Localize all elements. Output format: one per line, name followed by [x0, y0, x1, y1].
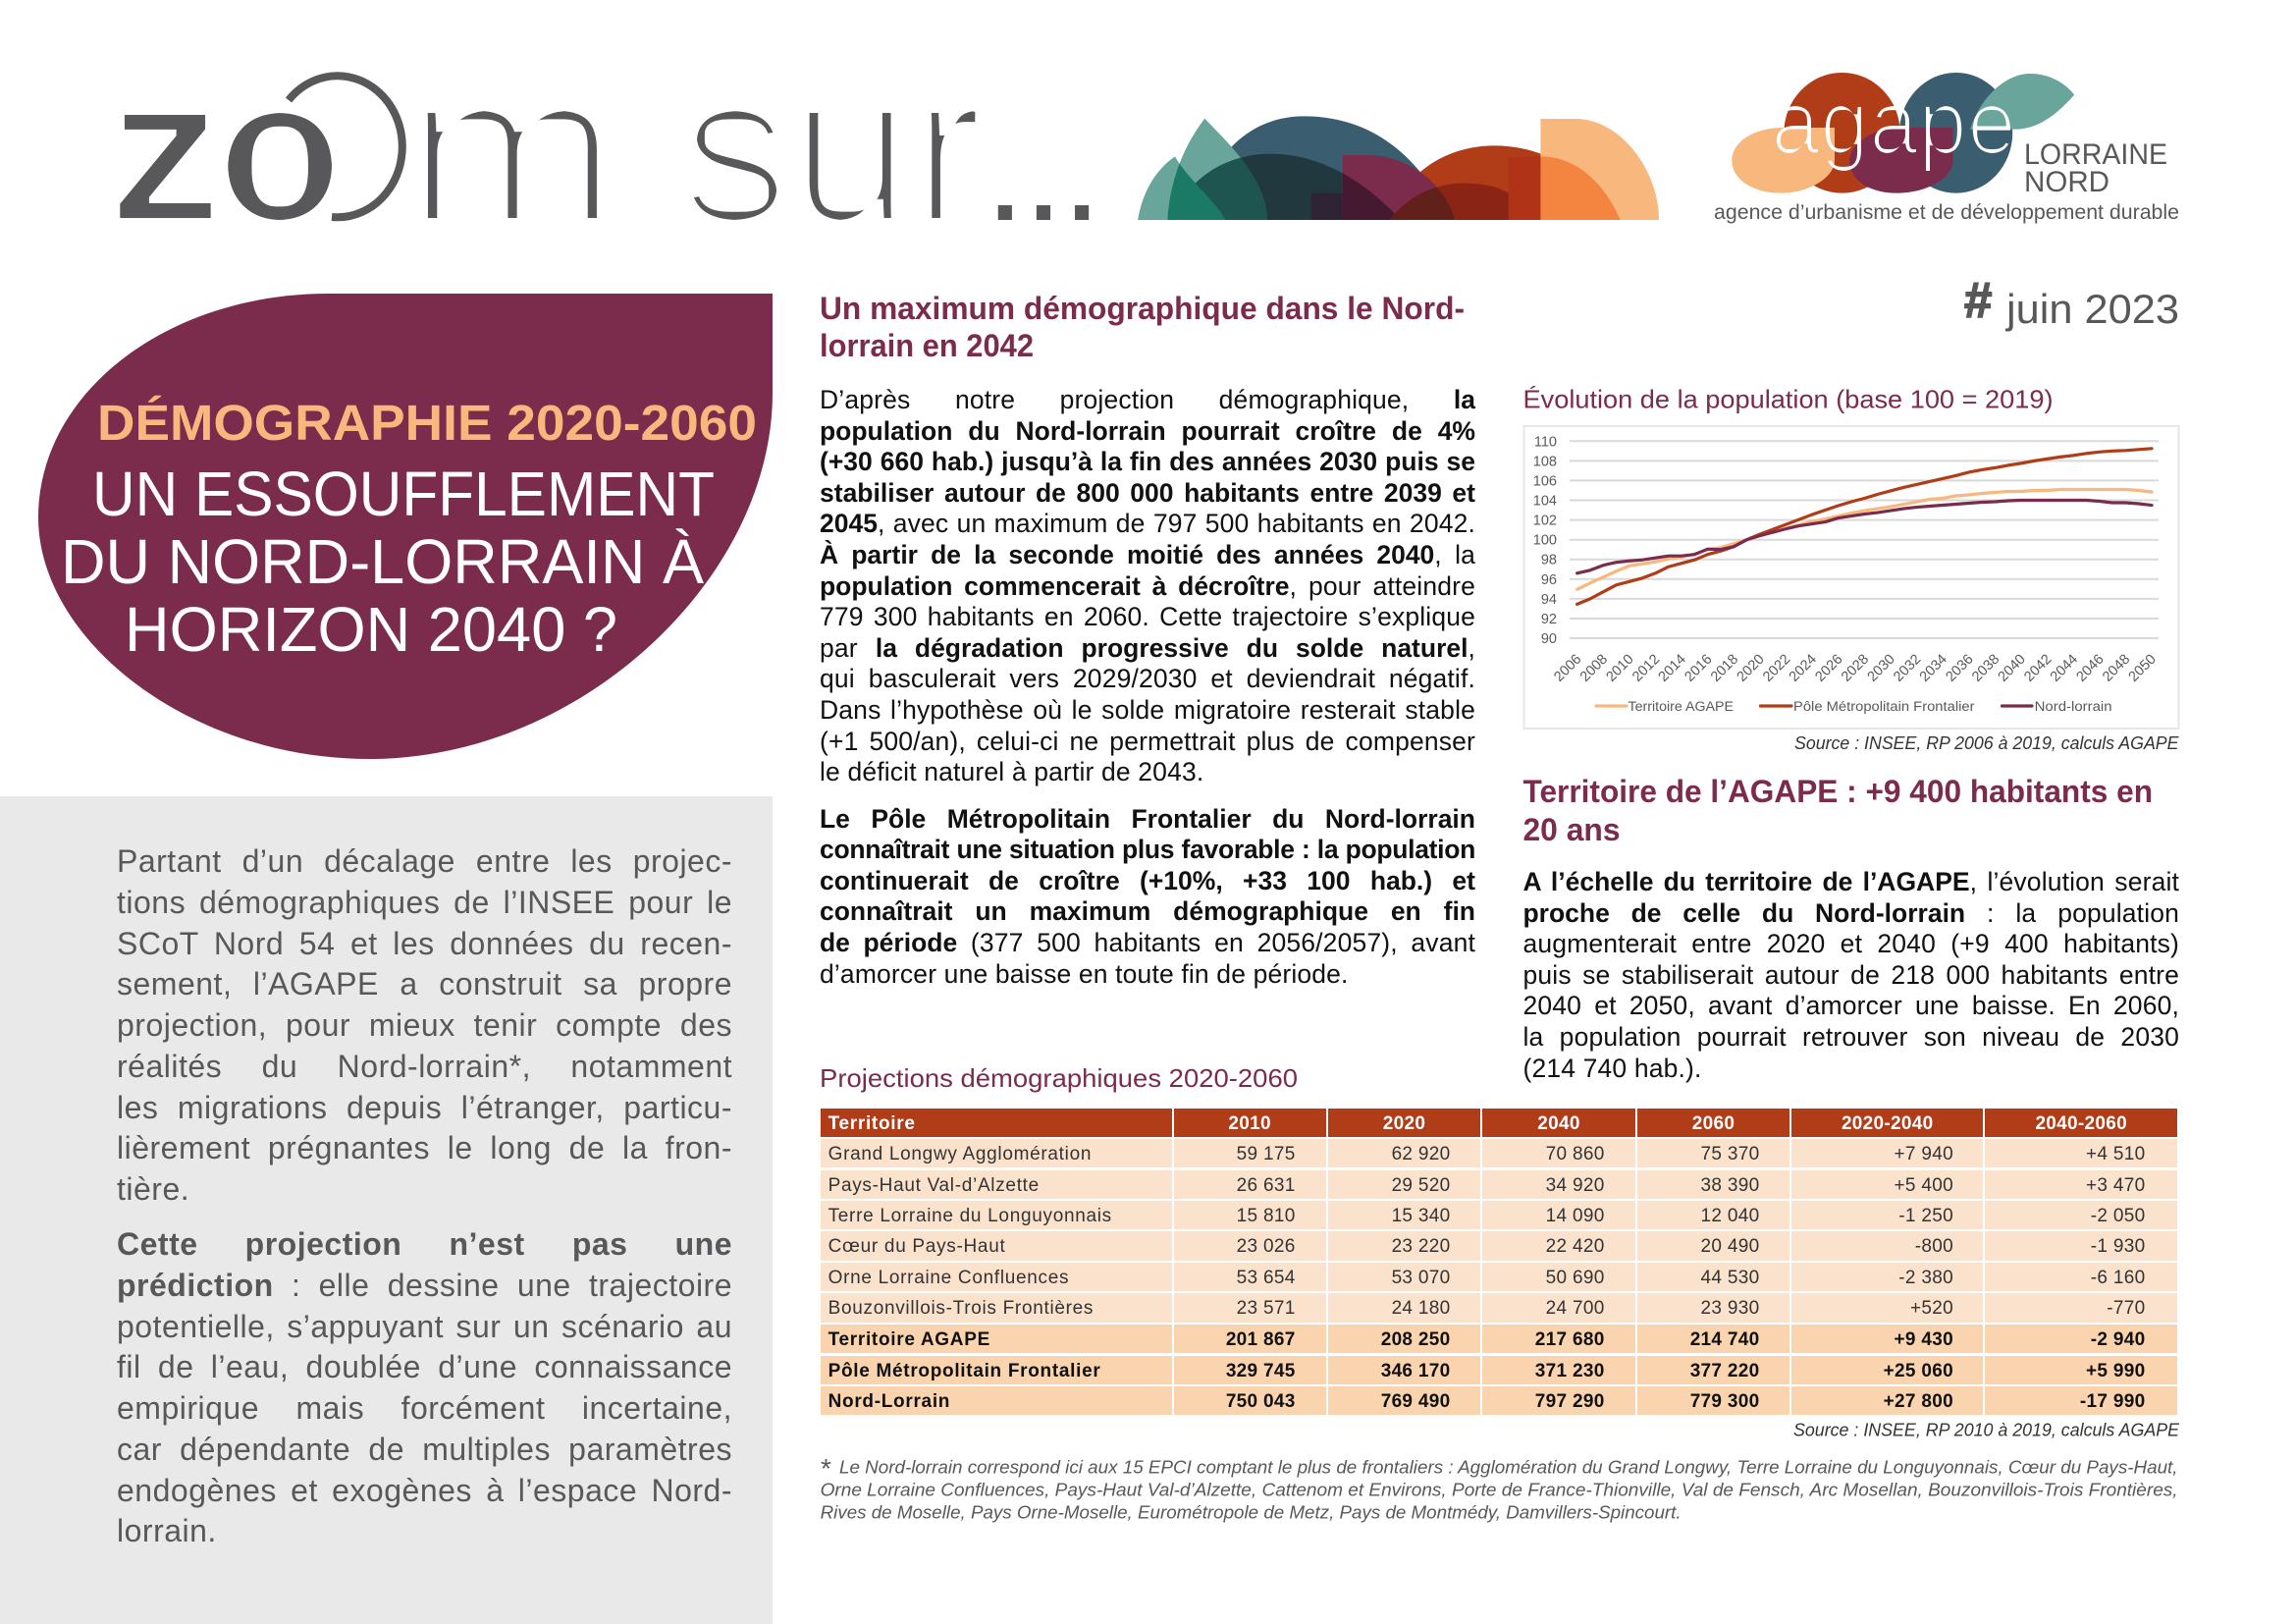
row: Terre Lorraine	[821, 1201, 2177, 1229]
text block: main paragraph two: Le Pôle Métropolitain Frontalier du Nord-lorrain	[820, 804, 1475, 834]
panel: title blob	[38, 294, 773, 759]
row: Bouzonvillois: 24 700	[1546, 1298, 1605, 1319]
row: Coeur du Pays-Haut: 23 220	[1392, 1236, 1450, 1257]
logo: agape Lorraine Nord: agence d’urbanisme et de développement durable	[1714, 201, 2179, 224]
heading: un maximum démographique: Un maximum démographique dans le Nord-	[820, 291, 1465, 326]
row: Territoire AGAPE: -2 940	[2091, 1329, 2145, 1350]
footnote: *	[821, 1453, 831, 1484]
chart x axis labels: 2036	[1943, 652, 1977, 685]
chart x axis labels: 2014	[1656, 652, 1689, 685]
chart x axis labels: 2048	[2100, 652, 2133, 685]
chart x axis labels: 2050	[2126, 652, 2160, 685]
heading: territoire de l'AGAPE: 20 ans	[1523, 812, 1620, 847]
table header: 2040	[1537, 1113, 1580, 1134]
text block: right column paragraph: 2040 et 2050, avant d’amorcer une baisse. En 2060,	[1523, 991, 2179, 1020]
row: Terre Lorraine: 12 040	[1701, 1206, 1759, 1226]
row: Bouzonvillois: 23 930	[1701, 1298, 1759, 1319]
title: zoom sur...	[108, 31, 1095, 266]
row: Terre Lorraine: -1 250	[1898, 1206, 1953, 1226]
chart source: Source : INSEE, RP 2006 à 2019, calculs AGAPE	[1794, 732, 2179, 753]
row: Territoire AGAPE: 214 740	[1690, 1329, 1759, 1350]
row: Bouzonvillois: 23 571	[1237, 1298, 1296, 1319]
row: Nord-Lorrain: 797 290	[1535, 1391, 1605, 1412]
row: Nord-Lorrain: 769 490	[1381, 1391, 1450, 1412]
row: Pays-Haut Val-d'Alzette	[821, 1170, 2177, 1199]
text block: side intro paragraph: Partant d’un décalage entre les projec-	[117, 843, 732, 879]
text block: main paragraph one: 2045, avec un maximum de 797 500 habitants en 2042.	[820, 509, 1475, 538]
row: Orne Lorraine: 53 070	[1392, 1268, 1450, 1288]
illustration: overlapping hills	[1138, 116, 1659, 220]
text block: side intro paragraph: lièrement prégnantes le long de la fron-	[117, 1130, 732, 1165]
row: Coeur du Pays-Haut	[821, 1231, 2177, 1261]
row: Pays-Haut Val-d'Alzette: +3 470	[2086, 1175, 2145, 1196]
row: Territoire AGAPE: Territoire AGAPE	[828, 1329, 990, 1350]
row: Pôle Métropolitain: 377 220	[1690, 1361, 1759, 1381]
chart x axis labels: 2012	[1629, 652, 1663, 685]
chart x axis labels: 2040	[1996, 652, 2029, 685]
row: Bouzonvillois: Bouzonvillois-Trois Frontières	[828, 1298, 1094, 1319]
chart x axis labels: 2006	[1551, 652, 1584, 685]
row: Pôle Métropolitain: 371 230	[1535, 1361, 1605, 1381]
text block: right column paragraph: la population pourrait retrouver son niveau de 2030	[1523, 1022, 2179, 1052]
row: Territoire AGAPE: 201 867	[1226, 1329, 1296, 1350]
row: Grand Longwy	[821, 1139, 2177, 1167]
row: Territoire AGAPE: 217 680	[1535, 1329, 1605, 1350]
chart x axis labels: 2016	[1682, 652, 1716, 685]
chart y axis labels: 92	[1541, 612, 1557, 627]
text block: main paragraph two: connaîtrait une situation plus favorable : la population	[820, 835, 1475, 864]
text block: right column paragraph: A l’échelle du territoire de l’AGAPE, l’évolution serait	[1523, 867, 2179, 896]
chart x axis labels: 2010	[1603, 652, 1637, 685]
text block: side intro paragraph: les migrations depuis l’étranger, particu-	[117, 1090, 732, 1125]
row: Nord-Lorrain: -17 990	[2080, 1391, 2145, 1412]
chart y axis labels: 102	[1533, 513, 1557, 528]
row: Grand Longwy: 62 920	[1392, 1144, 1450, 1164]
text block: side prediction paragraph: car dépendante de multiples paramètres	[117, 1432, 732, 1467]
chart x axis labels: 2046	[2073, 652, 2108, 685]
chart legend: Nord-lorrain	[2035, 699, 2112, 714]
row: Pays-Haut Val-d'Alzette: 38 390	[1701, 1175, 1759, 1196]
row: Grand Longwy: 70 860	[1546, 1144, 1605, 1164]
row: Coeur du Pays-Haut: -1 930	[2091, 1236, 2145, 1257]
chart data lines	[1577, 449, 2152, 604]
row: Coeur du Pays-Haut: -800	[1915, 1236, 1953, 1257]
text block: main paragraph two: connaîtrait un maximum démographique en fin	[820, 896, 1475, 926]
chart y axis labels: 106	[1533, 473, 1557, 489]
text block: side prediction paragraph: Cette projection n’est pas une	[117, 1226, 732, 1262]
text block: main paragraph two: d’amorcer une baisse en toute fin de période.	[820, 959, 1349, 989]
logo: agape Lorraine Nord	[1714, 73, 2179, 224]
chart x axis labels: 2030	[1865, 652, 1898, 685]
text block: side intro paragraph: tions démographiques de l’INSEE pour le	[117, 885, 732, 920]
row: Orne Lorraine: 50 690	[1546, 1268, 1605, 1288]
text block: side intro paragraph: SCoT Nord 54 et les données du recen-	[117, 925, 732, 960]
text block: right column paragraph: augmenterait entre 2020 et 2040 (+9 400 habitants)	[1523, 929, 2179, 958]
text block: main paragraph one: par la dégradation progressive du solde naturel,	[820, 633, 1475, 663]
chart y axis labels: 96	[1541, 572, 1557, 588]
chart y axis labels: 104	[1533, 493, 1557, 509]
panel: title blob: UN ESSOUFFLEMENT	[92, 459, 715, 529]
heading: un maximum démographique: lorrain en 2042	[820, 328, 1034, 363]
heading: territoire de l'AGAPE: Territoire de l’AGAPE : +9 400 habitants en	[1523, 774, 2153, 809]
chart x axis labels: 2044	[2048, 652, 2081, 685]
chart x axis labels: 2022	[1760, 652, 1793, 685]
text block: main paragraph one: À partir de la seconde moitié des années 2040, la	[820, 540, 1475, 569]
row: Pôle Métropolitain: +25 060	[1884, 1361, 1953, 1381]
row: Territoire AGAPE: 208 250	[1381, 1329, 1450, 1350]
chart x axis labels: 2026	[1812, 652, 1846, 685]
text block: main paragraph two: continuerait de croître (+10%, +33 100 hab.) et	[820, 866, 1475, 895]
chart y axis labels: 94	[1541, 592, 1557, 608]
title: zoom sur...: o	[217, 34, 343, 265]
heading: territoire de l'AGAPE	[1523, 774, 2153, 847]
logo: agape Lorraine Nord: NORD	[2024, 166, 2109, 198]
text block: main paragraph one	[820, 385, 1476, 786]
chart title: Évolution de la population (base 100 = 2019)	[1523, 385, 2054, 414]
chart legend: Territoire AGAPE	[1628, 699, 1734, 714]
table header: 2020-2040	[1842, 1113, 1934, 1134]
text block: main paragraph one: 779 300 habitants en 2060. Cette trajectoire s’explique	[820, 602, 1475, 631]
row: Coeur du Pays-Haut: 23 026	[1237, 1236, 1296, 1257]
row: Coeur du Pays-Haut: 22 420	[1546, 1236, 1605, 1257]
text block: main paragraph one: D’après notre projection démographique, la	[820, 385, 1475, 414]
footnote: Le Nord-lorrain correspond ici aux 15 EPCI comptant le plus de frontaliers : Agglomération du Grand Longwy, Terre Lorraine du Longuyonnais, Cœur du Pays-Haut,	[839, 1458, 2177, 1478]
text block: main paragraph two: de période (377 500 habitants en 2056/2057), avant	[820, 928, 1475, 957]
row: Bouzonvillois	[821, 1293, 2177, 1323]
logo: agape Lorraine Nord: agape	[1771, 74, 2016, 173]
table header: Territoire	[828, 1113, 916, 1134]
row: Bouzonvillois: 24 180	[1392, 1298, 1450, 1319]
panel: grey side background	[0, 796, 773, 1624]
row: Terre Lorraine: 15 810	[1237, 1206, 1296, 1226]
row: Nord-Lorrain: 750 043	[1226, 1391, 1296, 1412]
row: Nord-Lorrain: 779 300	[1690, 1391, 1759, 1412]
row: Orne Lorraine: Orne Lorraine Confluences	[828, 1268, 1069, 1288]
text block: main paragraph one: population commencerait à décroître, pour atteindre	[820, 571, 1475, 601]
text block: right column paragraph: puis se stabiliserait autour de 218 000 habitants entre	[1523, 960, 2179, 990]
text block: side prediction paragraph: fil de l’eau, doublée d’une connaissance	[117, 1349, 732, 1384]
row: Grand Longwy: +7 940	[1895, 1144, 1953, 1164]
chart y axis labels: 90	[1541, 631, 1557, 647]
chart x axis labels: 2018	[1708, 652, 1741, 685]
text block: side intro paragraph	[117, 843, 732, 1207]
row: Pôle Métropolitain: +5 990	[2086, 1361, 2145, 1381]
row: Coeur du Pays-Haut: Cœur du Pays-Haut	[828, 1236, 1005, 1257]
row: Bouzonvillois: -770	[2107, 1298, 2145, 1319]
table header: 2060	[1692, 1113, 1735, 1134]
table source: Source : INSEE, RP 2010 à 2019, calculs AGAPE	[1793, 1420, 2180, 1440]
row: Orne Lorraine: 53 654	[1237, 1268, 1296, 1288]
chart x axis labels: 2008	[1577, 652, 1611, 685]
row: Pôle Métropolitain: Pôle Métropolitain Frontalier	[828, 1361, 1100, 1381]
row: Pôle Métropolitain: 346 170	[1381, 1361, 1450, 1381]
chart x axis labels: 2032	[1891, 652, 1924, 685]
row: Orne Lorraine: -6 160	[2091, 1268, 2145, 1288]
text block: main paragraph one: le déficit naturel à partir de 2043.	[820, 757, 1203, 786]
chart x axis labels: 2028	[1839, 652, 1872, 685]
chart y axis labels: 98	[1541, 552, 1557, 568]
table header: 2020	[1383, 1113, 1425, 1134]
row: Terre Lorraine: -2 050	[2091, 1206, 2145, 1226]
chart y axis labels: 100	[1533, 532, 1557, 548]
row: Pays-Haut Val-d'Alzette: 26 631	[1237, 1175, 1296, 1196]
text block: main paragraph one: qui basculerait vers 2029/2030 et deviendrait négatif.	[820, 664, 1475, 693]
title: zoom sur...: sur	[681, 31, 984, 266]
logo: agape Lorraine Nord: LORRAINE	[2024, 138, 2167, 171]
text block: side intro paragraph: sement, l’AGAPE a construit sa propre	[117, 966, 732, 1001]
chart y axis labels	[1533, 434, 1557, 647]
text block: right column paragraph: (214 740 hab.).	[1523, 1054, 1702, 1083]
row: Territoire AGAPE	[821, 1325, 2177, 1353]
text block: main paragraph one: stabiliser autour de 800 000 habitants entre 2039 et	[820, 478, 1475, 508]
text block: side prediction paragraph: prédiction : elle dessine une trajectoire	[117, 1268, 732, 1303]
footnote: Rives de Moselle, Pays Orne-Moselle, Eurométropole de Metz, Pays de Montmédy, Damvillers-Spincourt.	[821, 1503, 1682, 1523]
table header: 2010	[1228, 1113, 1271, 1134]
title: zoom sur...: ...	[991, 132, 1095, 242]
row: Terre Lorraine: 14 090	[1546, 1206, 1605, 1226]
row: Nord-Lorrain	[821, 1386, 2177, 1415]
text block: main paragraph one: (+30 660 hab.) jusqu’à la fin des années 2030 puis se	[820, 447, 1475, 476]
row: Terre Lorraine: Terre Lorraine du Longuyonnais	[828, 1206, 1112, 1226]
chart x axis labels: 2034	[1917, 652, 1950, 685]
row: Terre Lorraine: 15 340	[1392, 1206, 1450, 1226]
row: Orne Lorraine: 44 530	[1701, 1268, 1759, 1288]
row: Pôle Métropolitain	[821, 1356, 2177, 1384]
row: Coeur du Pays-Haut: 20 490	[1701, 1236, 1759, 1257]
chart legend	[1596, 699, 2112, 714]
row: Grand Longwy: +4 510	[2086, 1144, 2145, 1164]
row: Pays-Haut Val-d'Alzette: Pays-Haut Val-d’Alzette	[828, 1175, 1040, 1196]
text block: side prediction paragraph: endogènes et exogènes à l’espace Nord-	[117, 1473, 732, 1508]
heading: un maximum démographique	[820, 291, 1465, 363]
text block: right column paragraph: proche de celle du Nord-lorrain : la population	[1523, 898, 2179, 928]
row: Bouzonvillois: +520	[1910, 1298, 1953, 1319]
panel: title blob: DU NORD-LORRAIN À	[61, 526, 704, 597]
text block: side prediction paragraph: lorrain.	[117, 1513, 217, 1548]
chart y axis labels: 108	[1533, 454, 1557, 469]
chart x axis labels: 2038	[1969, 652, 2002, 685]
row: Orne Lorraine: -2 380	[1898, 1268, 1953, 1288]
text block: right column paragraph	[1523, 867, 2179, 1083]
text block: side intro paragraph: réalités du Nord-lorrain*, notamment	[117, 1049, 732, 1084]
row: Pays-Haut Val-d'Alzette: 34 920	[1546, 1175, 1605, 1196]
text block: main paragraph two	[820, 804, 1475, 989]
chart x axis labels: 2042	[2021, 652, 2055, 685]
row: Orne Lorraine	[821, 1263, 2177, 1291]
row: Pays-Haut Val-d'Alzette: +5 400	[1895, 1175, 1953, 1196]
chart x axis labels: 2020	[1735, 652, 1768, 685]
text block: main paragraph one: Dans l’hypothèse où le solde migratoire resterait stable	[820, 695, 1475, 725]
line chart: population base 100	[1523, 426, 2179, 729]
table header: 2040-2060	[2035, 1113, 2127, 1134]
chart x axis labels: 2024	[1787, 652, 1820, 685]
row: Grand Longwy: Grand Longwy Agglomération	[828, 1144, 1092, 1164]
panel: title blob: DÉMOGRAPHIE 2020-2060	[97, 395, 757, 451]
issue date: # juin 2023: #	[1964, 272, 1992, 328]
table header	[821, 1109, 2177, 1137]
chart y axis labels: 110	[1534, 434, 1557, 450]
row: Nord-Lorrain: +27 800	[1884, 1391, 1953, 1412]
issue date: # juin 2023	[1964, 272, 2179, 332]
chart x axis labels	[1551, 652, 2160, 685]
title: zoom sur...: m	[402, 31, 620, 266]
text block: side prediction paragraph: potentielle, s’appuyant sur un scénario au	[117, 1308, 732, 1343]
text block: main paragraph one: population du Nord-lorrain pourrait croître de 4%	[820, 416, 1475, 446]
row: Territoire AGAPE: +9 430	[1895, 1329, 1953, 1350]
footnote: Orne Lorraine Confluences, Pays-Haut Val-d’Alzette, Cattenom et Environs, Porte de France-Thionville, Val de Fensch, Arc Mosellan, Bouzonvillois-Trois Frontières,	[821, 1481, 2178, 1500]
panel: title blob: HORIZON 2040 ?	[125, 594, 617, 665]
row: Grand Longwy: 75 370	[1701, 1144, 1759, 1164]
text block: side intro paragraph: projection, pour mieux tenir compte des	[117, 1007, 732, 1043]
row: Pays-Haut Val-d'Alzette: 29 520	[1392, 1175, 1450, 1196]
issue date: # juin 2023: juin 2023	[2004, 286, 2179, 332]
title: zoom sur...: z	[108, 34, 222, 265]
text block: side prediction paragraph	[117, 1226, 732, 1548]
text block: side intro paragraph: tière.	[117, 1171, 189, 1207]
table title: Projections démographiques 2020-2060	[820, 1063, 1298, 1093]
chart legend: Pôle Métropolitain Frontalier	[1793, 699, 1975, 714]
footnote	[821, 1453, 2178, 1523]
row: Grand Longwy: 59 175	[1237, 1144, 1296, 1164]
text block: main paragraph one: (+1 500/an), celui-ci ne permettrait plus de compenser	[820, 727, 1475, 756]
row: Nord-Lorrain: Nord-Lorrain	[828, 1391, 950, 1412]
text block: side prediction paragraph: empirique mais forcément incertaine,	[117, 1390, 732, 1426]
row: Pôle Métropolitain: 329 745	[1226, 1361, 1296, 1381]
